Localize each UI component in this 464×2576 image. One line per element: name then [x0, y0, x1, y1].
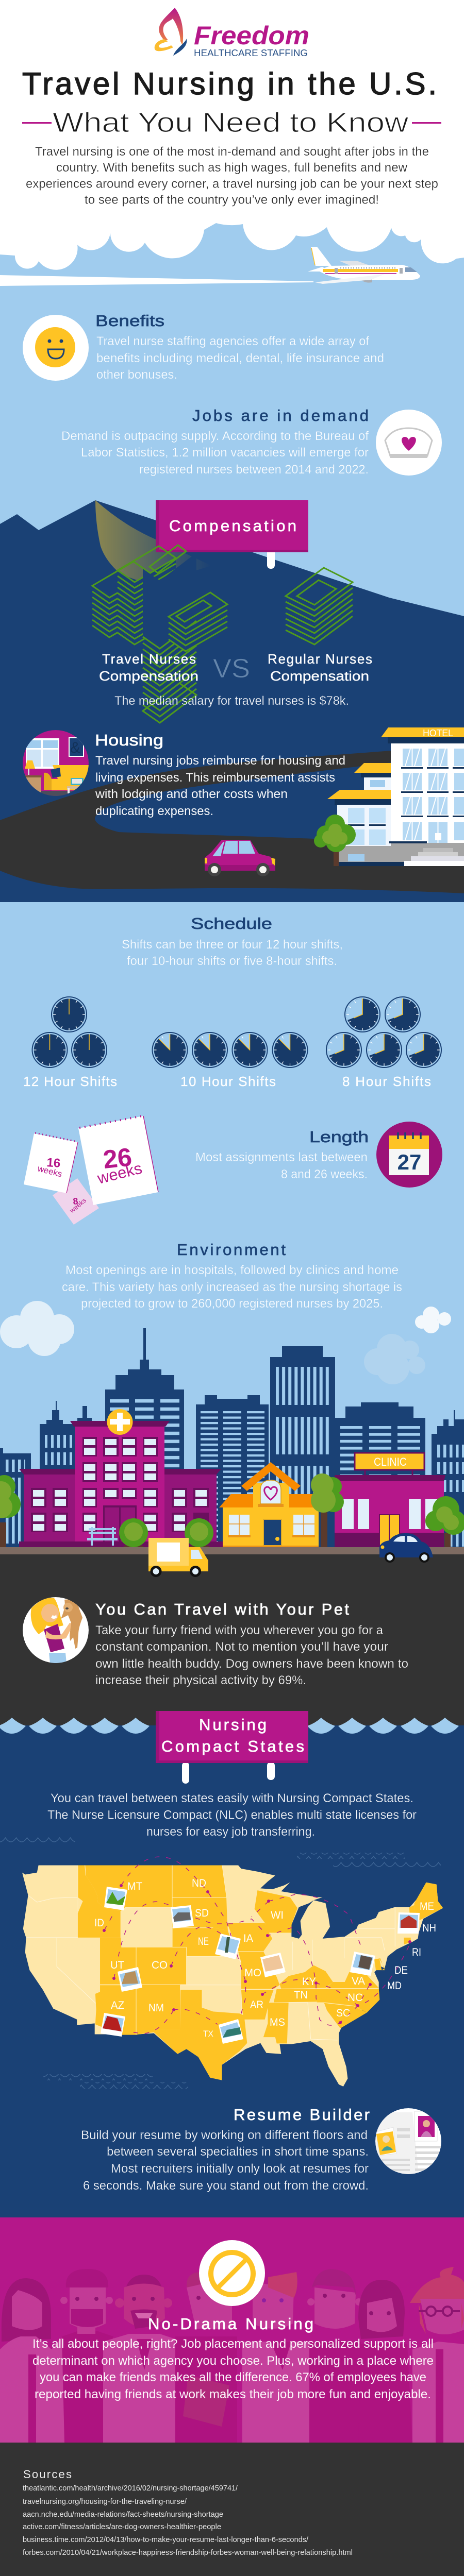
section: no-drama nursing — [32, 2240, 434, 2401]
hospital — [19, 1409, 223, 1547]
contrail — [0, 275, 313, 286]
nurse 3 — [103, 2275, 186, 2443]
median salary text: The median salary for travel nurses is $78k. — [114, 694, 349, 708]
source links: theatlantic.com/health/archive/2016/02/nursing-shortage/459741/ — [23, 2484, 238, 2493]
clocks: 8 hour shifts — [326, 997, 441, 1089]
map: state labels: NC — [347, 1992, 363, 2004]
icon: butterfly — [155, 8, 187, 56]
note: 8 weeks: weeks — [68, 1196, 88, 1215]
nurse 2 — [52, 2269, 124, 2443]
map: state labels: MD — [387, 1980, 402, 1992]
section: jobs in demand — [61, 406, 442, 477]
heading: schedule: Schedule — [191, 914, 272, 933]
note: 26 weeks — [78, 1116, 158, 1205]
map: state labels: ME — [420, 1901, 434, 1912]
body: resume builder: Build your resume by working on different floors and — [81, 2128, 368, 2142]
clocks: 8 hour shifts: 8 Hour Shifts — [342, 1074, 431, 1089]
chart: travel nurses money stacks — [92, 545, 227, 723]
intro text: to see parts of the country you’ve only ever imagined! — [85, 193, 379, 207]
intro text — [26, 145, 438, 207]
section: benefits — [23, 312, 384, 382]
icon: yellow van — [148, 1538, 208, 1577]
body: housing: with lodging and other costs when — [95, 787, 288, 801]
clocks: 10 hour shifts: 10 Hour Shifts — [180, 1074, 276, 1089]
body: jobs — [61, 429, 369, 477]
body: no-drama nursing: you can make friends makes all the difference. 67% of employees have — [40, 2370, 426, 2384]
body: benefits: other bonuses. — [96, 368, 177, 382]
section: housing text — [95, 731, 345, 818]
subtitle: What You Need to Know — [53, 107, 409, 138]
housing illustration: room — [23, 730, 89, 796]
compact states text — [47, 1791, 417, 1839]
heading: resume builder: Resume Builder — [234, 2106, 370, 2124]
road — [0, 751, 464, 893]
body: benefits: Travel nurse staffing agencies offer a wide array of — [96, 334, 369, 348]
body: housing: Travel nursing jobs reimburse for housing and — [95, 754, 345, 768]
icon: no symbol — [199, 2240, 265, 2306]
body: environment: Most openings are in hospitals, followed by clinics and home — [65, 1263, 399, 1277]
body: pet — [95, 1623, 408, 1687]
body: jobs: registered nurses between 2014 and 2022. — [139, 463, 369, 477]
body: pet: constant companion. Not to mention you’ll have your — [95, 1640, 388, 1654]
label: vs: VS — [213, 654, 250, 684]
clocks: 12 hour shifts — [23, 997, 117, 1089]
icon: woman with dog — [23, 1597, 89, 1663]
icon: smiley — [23, 315, 89, 381]
bench — [87, 1527, 118, 1546]
map: state labels: SC — [336, 2007, 350, 2019]
tree — [314, 815, 356, 866]
logo — [155, 8, 309, 58]
logo tagline: HEALTHCARE STAFFING — [194, 48, 308, 58]
nurse 5 — [242, 2272, 322, 2443]
map: state labels: SD — [195, 1907, 209, 1919]
heading: environment: Environment — [177, 1241, 286, 1259]
sign: nursing compact states: Compact States — [161, 1737, 304, 1755]
map: state labels — [94, 1877, 436, 2039]
body: no-drama nursing: reported having friends at work makes their job more fun and enjoyable. — [35, 2387, 431, 2401]
heading: length: Length — [309, 1128, 369, 1146]
map: state labels: UT — [110, 1959, 124, 1971]
body: jobs: Labor Statistics, 1.2 million vacancies will emerge for — [81, 446, 369, 460]
nurse 1 — [0, 2278, 61, 2443]
source links: aacn.nche.edu/media-relations/fact-sheets/nursing-shortage — [23, 2510, 223, 2519]
note: 16 weeks: 16 — [46, 1156, 61, 1171]
body: schedule — [122, 938, 343, 968]
chart: regular nurses money stack — [286, 568, 353, 645]
heading: sources: Sources — [23, 2468, 72, 2481]
note: 8 weeks: 8 — [73, 1196, 78, 1207]
body: resume builder: between several specialties in short time spans. — [107, 2145, 369, 2159]
section: sources — [23, 2468, 353, 2557]
housing illustration: room: & — [70, 739, 80, 756]
navy compact states background — [0, 1725, 464, 2217]
nurse 8 — [410, 2267, 464, 2443]
map: state labels: KY — [302, 1976, 316, 1988]
heading: benefits: Benefits — [95, 312, 164, 330]
clocks: 12 hour shifts: 12 Hour Shifts — [23, 1074, 117, 1089]
map: state labels: TX — [203, 2029, 213, 2039]
body: benefits — [96, 334, 384, 382]
map: state labels: NE — [198, 1936, 209, 1947]
trees in town — [0, 1473, 464, 1547]
heading: pet: You Can Travel with Your Pet — [95, 1600, 349, 1618]
section: environment text — [62, 1241, 402, 1311]
map: dashed travel routes — [104, 1857, 411, 2033]
label: regular nurses compensation: Compensation — [270, 668, 369, 684]
body: resume builder: Most recruiters initially only look at resumes for — [111, 2162, 369, 2176]
map: state labels: ND — [192, 1877, 206, 1889]
map: state labels: NH — [422, 1922, 436, 1934]
sidewalk — [0, 1547, 464, 1554]
clouds — [0, 1301, 451, 1384]
map: state labels: IA — [243, 1933, 253, 1944]
map: state labels: MO — [244, 1967, 261, 1979]
source links: travelnursing.org/housing-for-the-traveling-nurse/ — [23, 2497, 187, 2506]
body: jobs: Demand is outpacing supply. According to the Bureau of — [61, 429, 369, 443]
map: state shapes — [22, 1865, 443, 2087]
note: 26 weeks: 26 — [102, 1142, 133, 1174]
nurse 6 — [307, 2269, 363, 2443]
map: state labels: NM — [148, 2002, 164, 2014]
map: state labels: ID — [94, 1917, 104, 1929]
icon: airplane — [308, 247, 420, 284]
label: travel nurses compensation — [99, 651, 198, 684]
body: length: Most assignments last between — [195, 1150, 368, 1164]
nurse 7 — [358, 2280, 412, 2443]
navy mountain and compensation background — [0, 500, 464, 902]
body: no-drama nursing: It’s all about people, right? Job placement and personalized support is all — [32, 2337, 434, 2351]
source links: active.com/fitness/articles/are-dog-owners-healthier-people — [23, 2522, 221, 2531]
body: pet: own little health buddy. Dog owners have been known to — [95, 1657, 408, 1671]
body: pet: increase their physical activity by 69%. — [95, 1673, 306, 1687]
label: travel nurses compensation: Travel Nurses — [102, 651, 196, 667]
note: 16 weeks: weeks — [36, 1163, 63, 1179]
body: resume builder: 6 seconds. Make sure you stand out from the crowd. — [83, 2179, 369, 2193]
yellow house clinic — [219, 1462, 327, 1547]
body: environment: projected to grow to 260,000 registered nurses by 2025. — [81, 1297, 383, 1311]
body: environment: care. This variety has only increased as the nursing shortage is — [62, 1280, 402, 1294]
map: photo cards — [101, 1887, 420, 2044]
mountain shading — [95, 500, 211, 585]
map: route stops — [103, 1884, 411, 2024]
body: benefits: benefits including medical, dental, life insurance and — [96, 351, 384, 365]
map: state labels: CO — [152, 1959, 168, 1971]
icon: magenta car — [205, 840, 275, 876]
clinic building: CLINIC — [374, 1455, 407, 1468]
illustration: group of nurses — [0, 2267, 464, 2443]
heading: housing: Housing — [95, 731, 163, 749]
intro text: Travel nursing is one of the most in-demand and sought after jobs in the — [35, 145, 429, 159]
label: regular nurses compensation: Regular Nurses — [268, 651, 372, 667]
body: housing: duplicating expenses. — [95, 804, 213, 818]
map: state labels: MS — [270, 2016, 285, 2028]
icon: calendar: 27 — [397, 1150, 421, 1174]
map of the United States — [22, 1857, 443, 2087]
section: travel with pet text — [95, 1600, 408, 1687]
sign: compensation — [156, 500, 308, 569]
section: length — [195, 1122, 442, 1188]
source links: forbes.com/2010/04/21/workplace-happiness-friendship-forbes-woman-well-being-relationship.html — [23, 2548, 353, 2557]
compact states text: nurses for easy job transferring. — [146, 1825, 315, 1839]
decorative waves — [0, 1837, 441, 2089]
compact states text: You can travel between states easily with Nursing Compact States. — [51, 1791, 413, 1805]
map: state labels: WI — [271, 1909, 284, 1921]
map: state labels: TN — [294, 1989, 308, 2001]
no-drama background — [0, 2217, 464, 2443]
body: schedule: four 10-hour shifts or five 8-hour shifts. — [127, 954, 337, 968]
sign: nursing compact states: Nursing — [199, 1716, 267, 1734]
body: resume builder — [81, 2128, 369, 2193]
icon: calendar — [376, 1122, 442, 1188]
heading: no-drama nursing: No-Drama Nursing — [148, 2315, 313, 2333]
planters — [119, 1518, 213, 1558]
intro text: experiences around every corner, a travel nursing job can be your next step — [26, 177, 438, 191]
map: state labels: AR — [250, 1999, 263, 2011]
map: state labels: MT — [127, 1880, 142, 1892]
map: state labels: RI — [412, 1946, 421, 1958]
sign: compensation: Compensation — [169, 517, 296, 535]
body: length — [195, 1150, 368, 1181]
dark road band — [0, 1554, 464, 1725]
intro text: country. With benefits such as high wages, full benefits and new — [56, 161, 407, 175]
sign: nursing compact states — [156, 1711, 308, 1784]
source links: business.time.com/2012/04/13/how-to-make-your-resume-last-longer-than-6-seconds/ — [23, 2535, 309, 2544]
hotel building: HOTEL — [423, 728, 453, 738]
heading: jobs in demand: Jobs are in demand — [192, 406, 369, 425]
map: state labels: VA — [352, 1975, 365, 1987]
clinic building — [335, 1453, 445, 1547]
icon: resumes — [375, 2108, 442, 2174]
body: no-drama nursing — [32, 2337, 434, 2401]
section: resume builder — [81, 2106, 442, 2193]
note: 16 weeks — [24, 1133, 78, 1193]
nurse 4 — [175, 2272, 237, 2443]
body: housing — [95, 754, 345, 818]
title: Travel Nursing in the U.S. — [22, 66, 437, 101]
body: environment — [62, 1263, 402, 1311]
sky background with cloud edge — [0, 223, 464, 1556]
logo name: Freedom — [194, 21, 309, 50]
icon: blue car — [379, 1533, 433, 1563]
city skyline — [0, 1328, 464, 1547]
source links — [23, 2484, 353, 2557]
body: pet: Take your furry friend with you wherever you go for a — [95, 1623, 383, 1637]
map: state labels: AZ — [111, 1999, 124, 2011]
note: 26 weeks: weeks — [95, 1159, 144, 1188]
clocks: 10 hour shifts — [153, 1032, 307, 1089]
hotel building — [327, 727, 464, 866]
body: housing: living expenses. This reimbursement assists — [95, 771, 335, 785]
section: schedule — [23, 914, 441, 1089]
note pads: assignment weeks — [24, 1116, 158, 1225]
body: schedule: Shifts can be three or four 12 hour shifts, — [122, 938, 343, 952]
note: 8 weeks — [53, 1178, 99, 1225]
body: length: 8 and 26 weeks. — [281, 1167, 368, 1181]
compact states text: The Nurse Licensure Compact (NLC) enables multi state licenses for — [47, 1808, 417, 1822]
wave crests — [0, 1718, 459, 1734]
body: no-drama nursing: determinant on which agency you choose. Plus, working in a place where — [32, 2354, 434, 2368]
label: travel nurses compensation: Compensation — [99, 668, 198, 684]
map: state labels: DE — [394, 1964, 408, 1976]
label: regular nurses compensation — [268, 651, 372, 684]
sources background — [0, 2443, 464, 2576]
icon: nurse cap — [376, 410, 442, 476]
